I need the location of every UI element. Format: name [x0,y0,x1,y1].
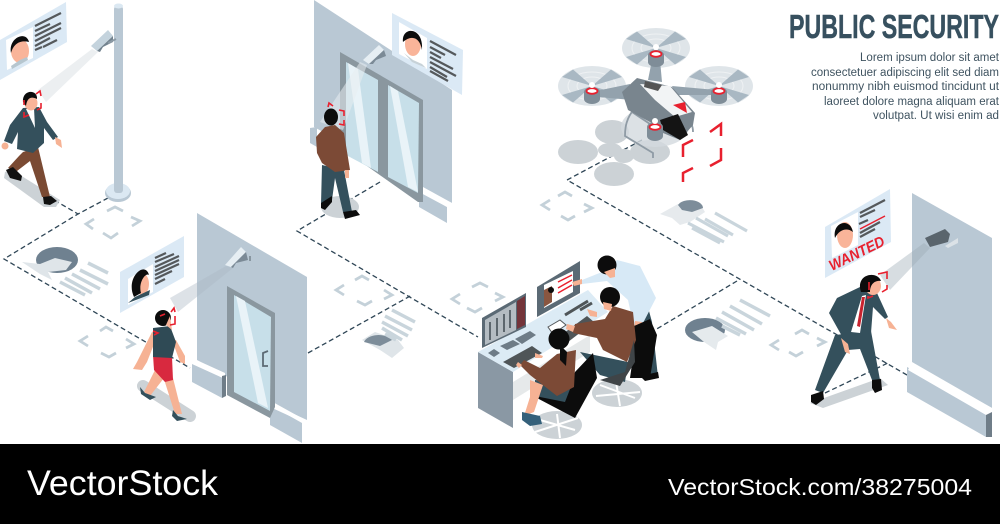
floor dashed connection lines [4,140,907,407]
monitor: suspect profile [537,261,580,317]
face detection marker [868,272,887,298]
rotors [622,28,690,68]
floor info icon: centre left [362,310,415,358]
left plinth [310,127,317,147]
chair base shadows [532,411,582,439]
walking man [2,91,62,207]
footer bar [0,444,1000,524]
scene: surveillance drone [558,28,753,186]
arms [596,60,716,100]
seated man [566,287,636,386]
floor info icon: left [22,247,108,295]
wall [197,213,307,421]
wall [314,0,452,203]
right plinth [270,405,302,443]
glass door [227,286,275,418]
description text: nonummy nibh euismod tincidunt ut [812,81,1000,93]
scene: control desk operators [478,256,659,439]
description text: consectetuer adipiscing elit sed diam [811,67,999,79]
wall [912,193,992,408]
scene: building doors and standing man [310,0,463,223]
red targeting frame [683,124,721,182]
double glass doors [340,52,423,202]
footer image id: VectorStock.com/38275004 [668,474,972,500]
wanted label: WANTED [826,233,888,275]
face detection marker [328,103,344,125]
drone legs [625,108,693,158]
ID card [392,13,463,95]
monitor: camera feeds [482,293,526,348]
face detection marker [24,91,41,117]
surveillance camera [38,30,116,102]
description text: laoreet dolore magna aliquam erat [824,96,1000,108]
scene: wall door and woman [120,213,307,443]
drone ground shadow [558,120,670,186]
surveillance camera [880,229,958,290]
description text: volutpat. Ut wisi enim ad [873,110,999,122]
scene: wanted man at wall [810,189,992,437]
description text [811,52,1000,122]
wanted poster card [825,189,891,278]
operator chair [625,319,657,378]
footer logo: VectorStock [27,464,219,503]
left plinth [192,360,225,398]
ID card [0,2,67,80]
plinth [907,367,992,437]
floor placeholder brackets [80,192,825,357]
seated woman with chair [516,328,597,426]
scene: lamp post camera and walking man [0,2,131,207]
standing man [316,103,360,219]
right plinth [419,190,447,223]
floor info icon: below drone [660,200,747,243]
standing supervisor [572,256,659,381]
surveillance camera [170,247,250,312]
description text: Lorem ipsum dolor sit amet [860,52,1000,64]
walking woman [133,308,190,421]
suspect man [810,272,897,408]
control desk [478,290,608,428]
surveillance camera [320,45,386,130]
ID card [120,236,184,313]
pole [105,4,131,202]
face detection marker [153,308,175,335]
drone body [622,78,695,140]
chair bases [535,382,640,438]
motors [584,50,727,141]
floor info icon: right [685,300,770,350]
